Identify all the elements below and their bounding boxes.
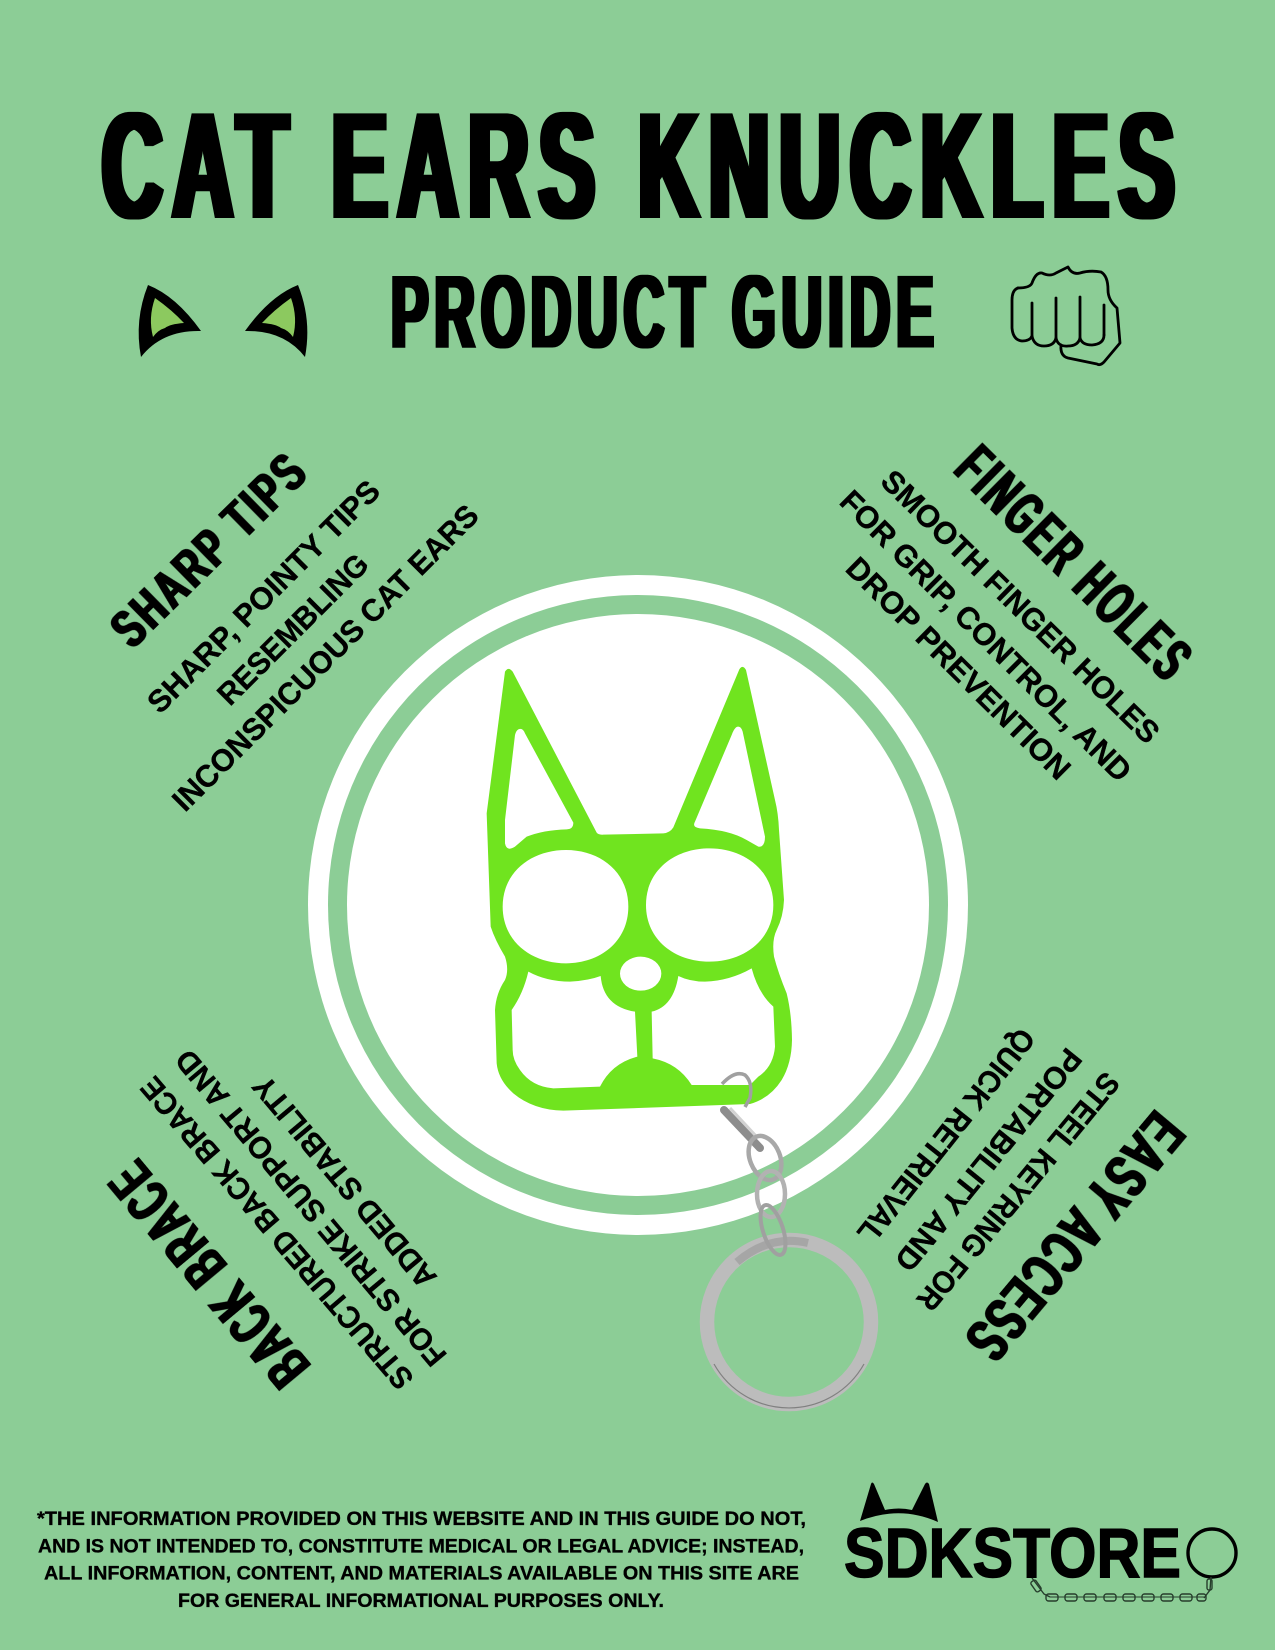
icon: fist — [1012, 267, 1120, 365]
text block: easy access description: STEEL KEYRING FOR — [910, 1066, 1127, 1317]
icon: cat ears — [139, 285, 307, 357]
text block: back brace description: STRUCTURED BACK BRACE — [133, 1070, 420, 1396]
heading: finger holes: FINGER HOLES — [942, 433, 1204, 693]
heading: back brace: BACK BRACE — [96, 1148, 322, 1400]
text block: sharp tips description: SHARP, POINTY TIPS — [140, 473, 387, 720]
subtitle: PRODUCT GUIDE — [391, 253, 934, 370]
panel: easy access — [850, 1022, 1198, 1373]
panel: back brace — [96, 1043, 453, 1400]
text block: back brace description: FOR STRIKE SUPPORT AND — [168, 1043, 453, 1373]
panel: finger holes — [833, 433, 1204, 789]
text block: back brace description: ADDED STABILITY — [245, 1068, 443, 1295]
heading: sharp tips: SHARP TIPS — [99, 442, 317, 658]
panel: sharp tips — [99, 442, 486, 818]
disclaimer: *THE INFORMATION PROVIDED ON THIS WEBSITE AND IN THIS GUIDE DO NOT, — [37, 1509, 806, 1530]
text block: easy access description — [850, 1022, 1127, 1317]
logo ring — [1188, 1529, 1236, 1577]
disclaimer: ALL INFORMATION, CONTENT, AND MATERIALS AVAILABLE ON THIS SITE ARE — [44, 1564, 799, 1584]
disclaimer: AND IS NOT INTENDED TO, CONSTITUTE MEDICAL OR LEGAL ADVICE; INSTEAD, — [38, 1536, 804, 1558]
center badge circles — [308, 575, 968, 1235]
text block: finger holes description: DROP PREVENTION — [839, 550, 1078, 787]
disclaimer — [37, 1509, 806, 1612]
text block: finger holes description: SMOOTH FINGER HOLES — [874, 463, 1167, 750]
text block: easy access description: PORTABILITY AND — [888, 1042, 1089, 1278]
logo chain — [1030, 1577, 1212, 1601]
logo cat ears — [860, 1482, 938, 1522]
logo wordmark: SDKSTORE — [844, 1514, 1181, 1592]
title: CAT EARS KNUCKLES — [102, 80, 1175, 250]
logo: sdkstore — [844, 1482, 1236, 1601]
heading: easy access: EASY ACCESS — [953, 1100, 1198, 1373]
text block: easy access description: QUICK RETRIEVAL — [850, 1022, 1042, 1250]
text block: sharp tips description: INCONSPICUOUS CAT EARS — [165, 498, 486, 818]
product: cat knuckles — [487, 667, 792, 1111]
jump ring — [722, 1074, 751, 1107]
split key ring — [707, 1240, 871, 1408]
keychain — [707, 1108, 871, 1408]
text block: sharp tips description: RESEMBLING — [210, 546, 376, 712]
disclaimer: FOR GENERAL INFORMATIONAL PURPOSES ONLY. — [178, 1591, 664, 1612]
text block: finger holes description: FOR GRIP, CONTROL, AND — [833, 483, 1139, 789]
